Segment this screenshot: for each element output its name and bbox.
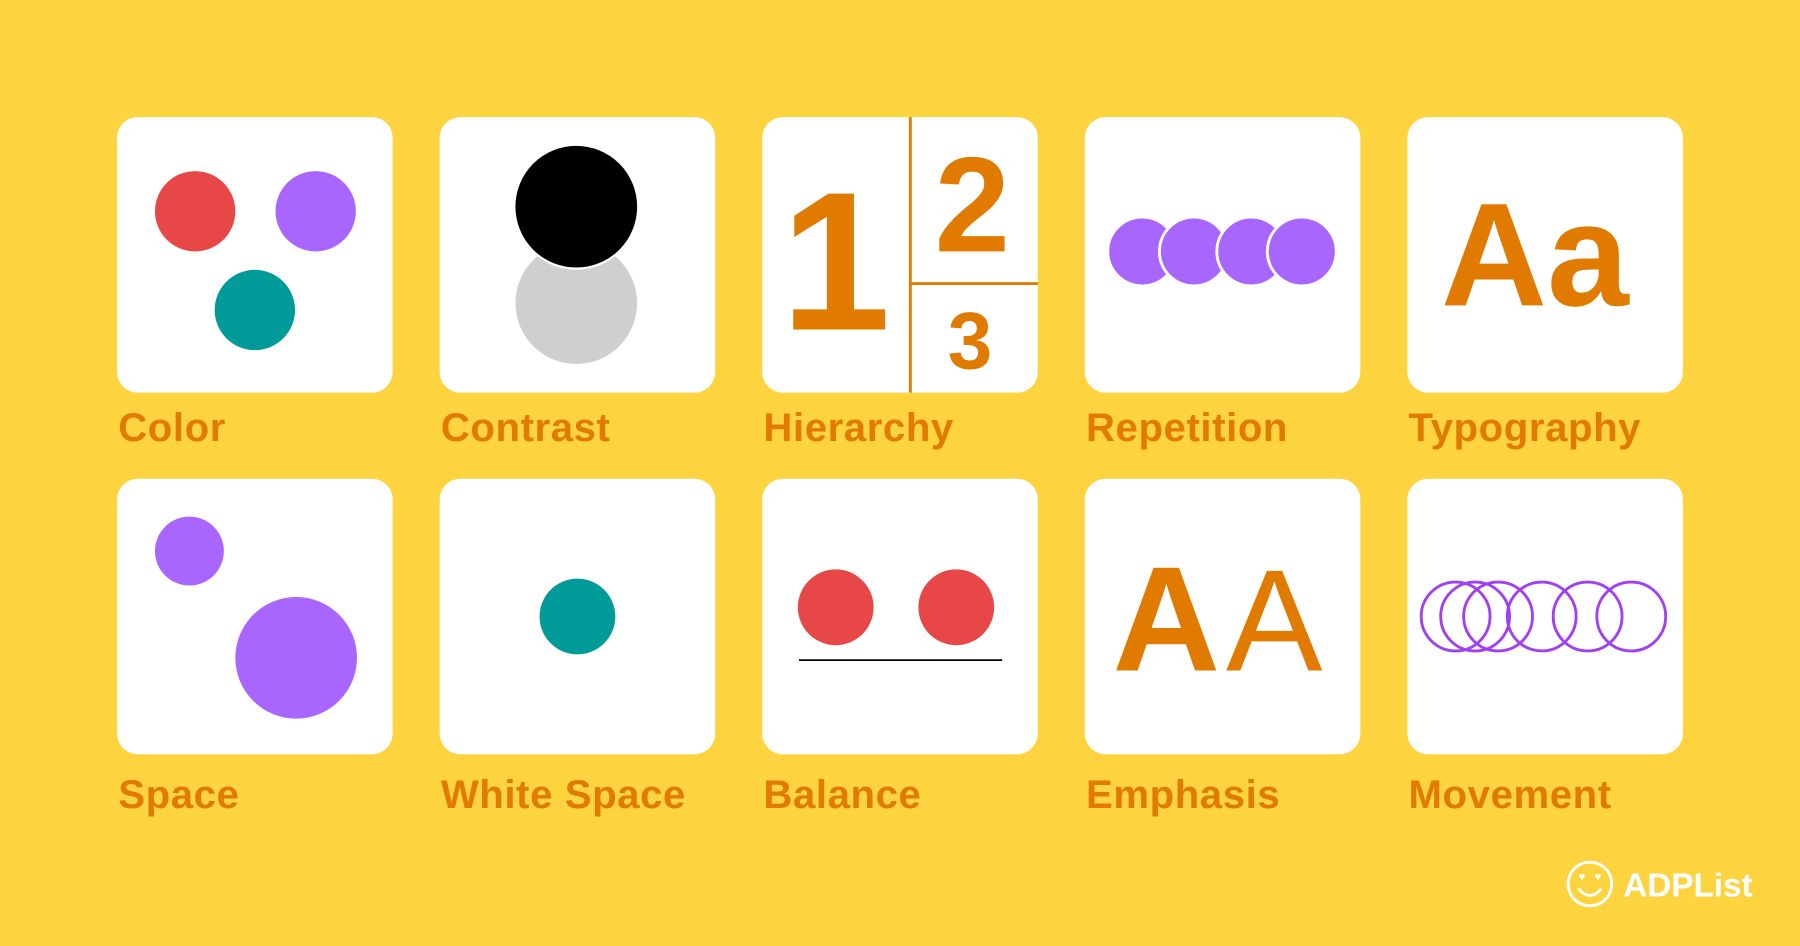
panel: hierarchy: 3: [948, 297, 992, 387]
label: contrast: Contrast: [441, 405, 611, 450]
panel: contrast: [440, 117, 715, 393]
panel: white space: [440, 479, 715, 754]
panel: typography: [1407, 117, 1683, 393]
logo: ADPList: ♥: [1595, 872, 1602, 884]
panel: color: [117, 117, 393, 393]
label: movement: Movement: [1409, 772, 1612, 817]
panel: hierarchy: 1: [781, 151, 891, 372]
logo: ADPList: ADPList: [1623, 868, 1753, 905]
panel: hierarchy: 2: [935, 128, 1010, 280]
panel: emphasis: A: [1112, 535, 1220, 702]
panel: hierarchy: [762, 117, 1038, 393]
panel: balance: [762, 479, 1038, 754]
panel: repetition: [1085, 117, 1360, 393]
label: color: Color: [118, 405, 226, 450]
label: white space: White Space: [441, 772, 686, 817]
label: emphasis: Emphasis: [1086, 772, 1280, 817]
label: space: Space: [118, 772, 239, 817]
label: repetition: Repetition: [1086, 405, 1288, 450]
panel: typography: Aa: [1441, 173, 1630, 337]
logo: ADPList: ♥: [1578, 872, 1585, 884]
logo: ADPList: [1568, 862, 1753, 906]
label: typography: Typography: [1409, 405, 1641, 450]
panel: emphasis: A: [1226, 539, 1323, 701]
panel: space: [117, 479, 393, 754]
label: hierarchy: Hierarchy: [763, 405, 954, 450]
panel: movement: [1407, 479, 1683, 754]
panel: emphasis: [1085, 479, 1360, 754]
label: balance: Balance: [763, 772, 921, 817]
